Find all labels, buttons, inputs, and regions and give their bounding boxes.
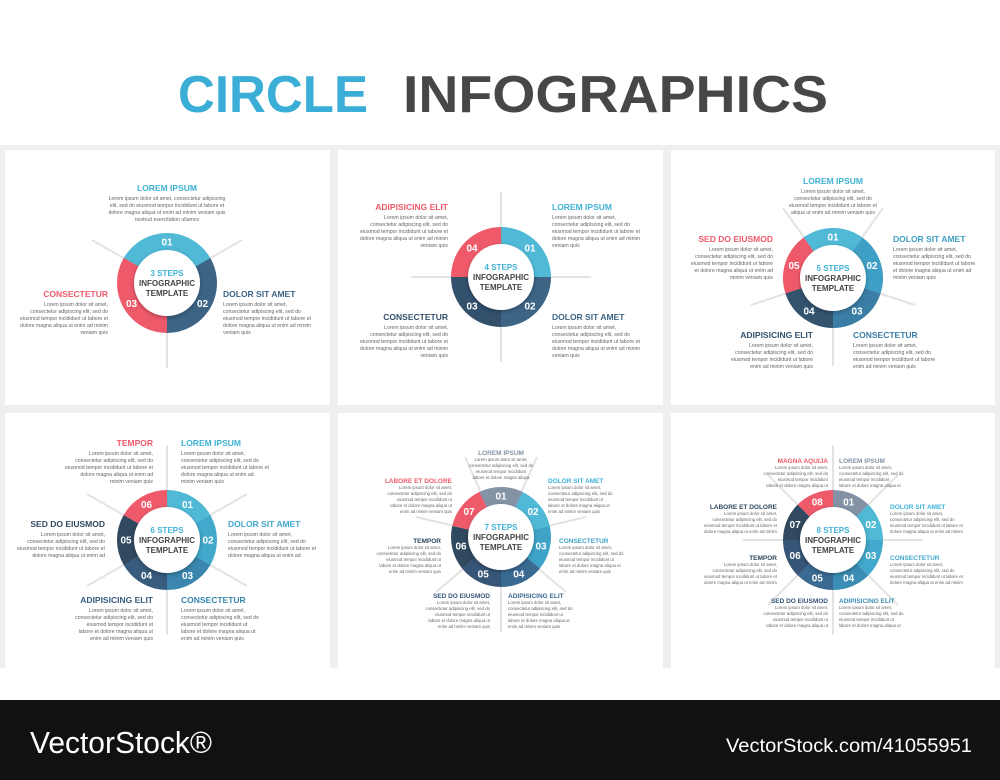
text: sed do eiusmod: minim veniam quis	[730, 275, 773, 281]
panel: 5 steps: INFOGRAPHIC	[805, 274, 861, 283]
text: magna aquija: consectetur adipiscing elit, sed do	[764, 471, 829, 476]
text: adipisicing elit: ADIPISICING ELIT	[839, 598, 895, 605]
panel: 7 steps: 06	[455, 542, 467, 553]
panel: 6 steps: 04	[141, 571, 152, 582]
text: labore et dolore	[385, 478, 453, 514]
text: adipisicing elit: labore et dolore magna aliqua ut	[839, 623, 901, 628]
footer bar: VectorStock®	[30, 725, 212, 760]
text: adipisicing elit: labore et dolore magna aliqua ut	[79, 629, 154, 635]
text: consectetur: enim ad minim veniam quis	[559, 569, 611, 574]
text: labore et dolore: eiusmod tempor incididunt ut labore et	[704, 523, 778, 528]
text: magna aquija: Lorem ipsum dolor sit amet,	[775, 465, 828, 470]
panel: 6 steps: 03	[182, 571, 193, 582]
text: consectetur: consectetur adipiscing elit, sed do	[370, 332, 448, 338]
panel: 6 steps: 06	[141, 500, 152, 511]
text: lorem ipsum: dolore magna aliqua ut enim ad minim veniam quis	[108, 210, 226, 216]
panel: 4 steps: 03	[466, 302, 478, 312]
panel: 8 steps: INFOGRAPHIC	[805, 536, 861, 545]
panel: 3 steps: 01	[161, 238, 173, 248]
text: tempor: consectetur adipiscing elit, sed do	[376, 551, 442, 556]
text: sed do eiusmod: consectetur adipiscing elit, sed do	[426, 606, 491, 611]
text: labore et dolore: Lorem ipsum dolor sit amet,	[724, 511, 777, 516]
text: dolor sit amet: enim ad minim veniam quis	[548, 509, 600, 514]
text: adipisicing elit: enim ad minim veniam quis	[750, 364, 813, 370]
text: magna aquija: MAGNA AQUIJA	[778, 458, 828, 465]
panel: 5 steps: 01	[827, 232, 839, 244]
text: lorem ipsum: LOREM IPSUM	[181, 438, 241, 448]
text: consectetur	[360, 312, 449, 359]
text: sed do eiusmod: SED DO EIUSMOD	[30, 519, 105, 529]
text: consectetur: Lorem ipsum dolor sit amet,	[559, 545, 612, 550]
text: adipisicing elit: consectetur adipiscing elit, sed do	[75, 615, 153, 621]
text: consectetur: Lorem ipsum dolor sit amet,	[44, 302, 108, 308]
text: dolor sit amet: eiusmod tempor incididunt ut labore et	[228, 546, 317, 552]
text: lorem ipsum: Lorem ipsum dolor sit amet,	[181, 451, 245, 457]
title: INFOGRAPHICS	[403, 66, 828, 124]
text: lorem ipsum: Lorem ipsum dolor sit amet,	[839, 465, 892, 470]
text: consectetur: labore et dolore magna aliqua ut	[181, 629, 256, 635]
text: sed do eiusmod	[426, 593, 491, 629]
text: dolor sit amet	[223, 289, 312, 336]
panel: 6 steps: 01	[182, 500, 193, 511]
text: dolor sit amet: DOLOR SIT AMET	[548, 478, 603, 485]
panel: 7 steps: 7 STEPS	[485, 523, 518, 532]
text: sed do eiusmod: eiusmod tempor incididunt ut	[773, 617, 829, 622]
panel: 6 steps: 02	[202, 536, 214, 546]
text: consectetur: CONSECTETUR	[181, 595, 246, 605]
text: lorem ipsum: consectetur adipiscing elit, sed do	[552, 222, 630, 228]
panel: 3 steps: 02	[197, 299, 208, 310]
text: consectetur: CONSECTETUR	[43, 289, 108, 299]
text: sed do eiusmod: consectetur adipiscing elit, sed do	[764, 611, 829, 616]
text: consectetur: eiusmod tempor incididunt ut labore et	[890, 574, 964, 579]
text: sed do eiusmod: consectetur adipiscing elit, sed do	[695, 254, 773, 260]
text: tempor: dolore magna aliqua ut enim ad minim	[704, 580, 777, 585]
text: lorem ipsum	[108, 183, 226, 223]
text: dolor sit amet: consectetur adipiscing elit, sed do	[223, 309, 301, 315]
text: consectetur: consectetur adipiscing elit, sed do	[853, 350, 931, 356]
text: adipisicing elit: Lorem ipsum dolor sit amet,	[839, 605, 892, 610]
text: sed do eiusmod: et dolore magna aliqua ut enim ad	[695, 268, 773, 274]
panel: 3 steps: 03	[126, 299, 137, 310]
text: adipisicing elit	[508, 593, 573, 629]
text: lorem ipsum: labore et dolore magna aliqua ut	[839, 483, 901, 488]
panel: 7 steps: 03	[535, 542, 547, 553]
panel: 7 steps: INFOGRAPHIC	[473, 533, 529, 542]
text: magna aquija: labore et dolore magna aliqua ut	[766, 483, 829, 488]
text: tempor: labore et dolore magna aliqua ut	[379, 563, 442, 568]
text: dolor sit amet: consectetur adipiscing elit, sed do	[548, 491, 613, 496]
text: lorem ipsum: elit, sed do eiusmod tempor incididunt ut labore et	[110, 203, 225, 209]
text: consectetur: veniam quis	[80, 330, 108, 336]
text: labore et dolore: Lorem ipsum dolor sit amet,	[399, 485, 452, 490]
text: adipisicing elit	[839, 598, 904, 628]
text: tempor: Lorem ipsum dolor sit amet,	[724, 562, 777, 567]
text: dolor sit amet: labore et dolore magna aliqua ut	[548, 503, 610, 508]
text: lorem ipsum: labore et dolore magna aliqua	[473, 475, 530, 480]
text: sed do eiusmod: labore et dolore magna aliqua ut	[766, 623, 829, 628]
text: dolor sit amet: et dolore magna aliqua ut enim ad	[893, 268, 972, 274]
text: labore et dolore: dolore magna aliqua ut enim ad minim	[704, 529, 777, 534]
panel: 6 steps: TEMPLATE	[146, 546, 189, 555]
text: sed do eiusmod: eiusmod tempor incididunt ut	[435, 612, 491, 617]
text: tempor: enim ad minim veniam quis	[389, 569, 441, 574]
text: lorem ipsum: eiusmod tempor incididunt	[839, 477, 890, 482]
text: sed do eiusmod: dolore magna aliqua ut enim ad	[32, 553, 105, 559]
text: adipisicing elit: eiusmod tempor incididunt ut	[839, 617, 895, 622]
text: consectetur: dolore magna aliqua ut enim ad minim	[20, 323, 108, 329]
panel: 8 steps: 01	[843, 498, 855, 509]
ring: 8 segments	[775, 482, 891, 598]
text: dolor sit amet: eiusmod tempor incididunt ut	[548, 497, 604, 502]
text: labore et dolore	[704, 504, 778, 534]
text: sed do eiusmod: Lorem ipsum dolor sit amet,	[709, 247, 773, 253]
panel: 8 steps	[671, 413, 995, 668]
text: lorem ipsum	[789, 176, 878, 216]
text: tempor: dolore magna aliqua ut enim ad	[80, 472, 153, 478]
ring: 5 segments	[776, 221, 890, 335]
text: labore et dolore: LABORE ET DOLORE	[385, 478, 453, 485]
panel: 3 steps: 3 STEPS	[151, 269, 184, 278]
text: sed do eiusmod: Lorem ipsum dolor sit amet,	[775, 605, 828, 610]
text: consectetur: enim ad minim veniam quis	[181, 636, 244, 642]
text: lorem ipsum: LOREM IPSUM	[839, 458, 885, 465]
text: lorem ipsum	[181, 438, 270, 485]
text: adipisicing elit: veniam quis	[420, 243, 448, 249]
panel: 7 steps: 04	[513, 569, 525, 580]
text: lorem ipsum: aliqua ut enim ad minim veniam quis	[791, 210, 875, 216]
text: adipisicing elit: enim ad minim veniam quis	[508, 624, 560, 629]
text: tempor: consectetur adipiscing elit, sed do	[75, 458, 153, 464]
text: consectetur: Lorem ipsum dolor sit amet,	[853, 343, 917, 349]
ring: 7 segments	[443, 479, 559, 595]
text: dolor sit amet: consectetur adipiscing elit, sed do	[890, 517, 955, 522]
text: lorem ipsum: nostrud exercitation ullamco	[135, 217, 199, 223]
text: consectetur: dolore magna aliqua ut enim ad minim	[360, 346, 448, 352]
text: dolor sit amet	[893, 234, 975, 281]
text: sed do eiusmod: labore et dolore magna aliqua ut	[428, 618, 491, 623]
text: sed do eiusmod: SED DO EIUSMOD	[771, 598, 828, 605]
footer bar: VectorStock.com/41055951	[726, 736, 972, 757]
text: lorem ipsum: Lorem ipsum dolor sit amet,	[474, 457, 528, 462]
text: dolor sit amet: DOLOR SIT AMET	[890, 504, 945, 511]
text: adipisicing elit: ADIPISICING ELIT	[740, 330, 814, 340]
ring: 4 segments	[460, 236, 542, 318]
panel: 7 steps	[338, 413, 663, 668]
text: lorem ipsum: LOREM IPSUM	[803, 176, 863, 186]
text: lorem ipsum: consectetur adipiscing elit, sed do	[794, 196, 872, 202]
text: adipisicing elit	[360, 202, 449, 249]
text: tempor: minim veniam quis	[110, 479, 153, 485]
panel: 3 steps: INFOGRAPHIC	[139, 279, 195, 288]
text: consectetur: Lorem ipsum dolor sit amet,	[181, 608, 245, 614]
text: adipisicing elit: consectetur adipiscing elit, sed do	[508, 606, 573, 611]
text: tempor: eiusmod tempor incididunt ut labore et	[65, 465, 154, 471]
text: lorem ipsum	[839, 458, 904, 488]
panel: 6 steps	[5, 413, 330, 668]
panel: 8 steps: 03	[865, 551, 877, 562]
text: lorem ipsum: consectetur adipiscing elit, sed do	[181, 458, 259, 464]
text: adipisicing elit	[731, 330, 814, 370]
text: lorem ipsum: Lorem ipsum dolor sit amet,	[801, 189, 865, 195]
text: dolor sit amet: Lorem ipsum dolor sit amet,	[552, 325, 616, 331]
panel: 4 steps: 4 STEPS	[485, 263, 518, 272]
panel: 7 steps: 02	[527, 507, 539, 518]
panel: 5 steps: 02	[866, 261, 878, 272]
panel: 8 steps: 08	[812, 498, 823, 509]
text: dolor sit amet: Lorem ipsum dolor sit amet,	[890, 511, 943, 516]
text: dolor sit amet: DOLOR SIT AMET	[893, 234, 966, 244]
panel: 4 steps: TEMPLATE	[480, 283, 523, 292]
text: labore et dolore: eiusmod tempor incididunt ut	[397, 497, 453, 502]
text: dolor sit amet	[548, 478, 613, 514]
text: lorem ipsum: eiusmod tempor incididunt ut labore et	[552, 229, 641, 235]
text: tempor: TEMPOR	[413, 538, 441, 545]
text: dolor sit amet: Lorem ipsum dolor sit amet,	[223, 302, 287, 308]
text: dolor sit amet: dolore magna aliqua ut enim ad minim	[223, 323, 311, 329]
text: tempor: Lorem ipsum dolor sit amet,	[388, 545, 441, 550]
text: consectetur: eiusmod tempor incididunt ut labore et	[360, 339, 449, 345]
text: dolor sit amet: dolore magna aliqua ut enim ad minim	[552, 346, 640, 352]
text: tempor: TEMPOR	[117, 438, 153, 448]
panel: 6 steps: INFOGRAPHIC	[139, 536, 195, 545]
text: tempor: consectetur adipiscing elit, sed do	[712, 568, 778, 573]
text: dolor sit amet: veniam quis	[223, 330, 251, 336]
text: consectetur: Lorem ipsum dolor sit amet,	[890, 562, 943, 567]
panel: 8 steps: 05	[812, 573, 823, 584]
text: tempor: TEMPOR	[749, 555, 777, 562]
text: lorem ipsum: eiusmod tempor incididunt ut labore et	[181, 465, 270, 471]
text: adipisicing elit: ADIPISICING ELIT	[80, 595, 154, 605]
text: sed do eiusmod: Lorem ipsum dolor sit amet,	[437, 600, 490, 605]
text: magna aquija	[764, 458, 829, 488]
text: adipisicing elit: ADIPISICING ELIT	[508, 593, 564, 600]
text: tempor: eiusmod tempor incididunt ut labore et	[704, 574, 778, 579]
text: consectetur: Lorem ipsum dolor sit amet,	[384, 325, 448, 331]
text: lorem ipsum: LOREM IPSUM	[478, 450, 524, 457]
ring: 3 segments	[111, 227, 223, 339]
text: sed do eiusmod: eiusmod tempor incididunt ut labore	[691, 261, 773, 267]
text: consectetur: consectetur adipiscing elit, sed do	[890, 568, 955, 573]
text: adipisicing elit: eiusmod tempor incididunt ut	[508, 612, 564, 617]
text: dolor sit amet: eiusmod tempor incididunt ut labore et	[552, 339, 641, 345]
text: consectetur	[853, 330, 935, 370]
panel: 3 steps	[5, 150, 330, 405]
panel: 8 steps: 06	[790, 551, 801, 562]
text: labore et dolore: consectetur adipiscing elit, sed do	[388, 491, 453, 496]
text: adipisicing elit: Lorem ipsum dolor sit amet,	[89, 608, 153, 614]
text: dolor sit amet: minim veniam quis	[893, 275, 936, 281]
text: adipisicing elit: eiusmod tempor incididunt ut labore	[731, 357, 813, 363]
text: dolor sit amet: eiusmod tempor incididunt ut labore et	[890, 523, 964, 528]
text: labore et dolore: LABORE ET DOLORE	[710, 504, 778, 511]
panel: 4 steps: 02	[524, 302, 536, 312]
text: dolor sit amet	[228, 519, 317, 559]
text: tempor: Lorem ipsum dolor sit amet,	[89, 451, 153, 457]
text: consectetur: eiusmod tempor incididunt ut labore et	[20, 316, 109, 322]
panel: 4 steps: 01	[524, 244, 536, 254]
text: consectetur: dolore magna aliqua ut enim ad minim	[890, 580, 963, 585]
text: consectetur	[890, 555, 964, 585]
panel: 5 steps: 03	[851, 307, 863, 318]
text: labore et dolore: enim ad minim veniam quis	[400, 509, 452, 514]
panel: 3 steps: TEMPLATE	[146, 289, 189, 298]
text: sed do eiusmod	[764, 598, 829, 628]
text: lorem ipsum: minim veniam quis	[181, 479, 224, 485]
text: consectetur: enim ad minim veniam quis	[853, 364, 916, 370]
panel: 4 steps	[338, 150, 663, 405]
text: adipisicing elit: eiusmod tempor incididunt ut labore et	[360, 229, 449, 235]
text: adipisicing elit: consectetur adipiscing elit, sed do	[735, 350, 813, 356]
text: sed do eiusmod: enim ad minim veniam quis	[438, 624, 490, 629]
text: lorem ipsum: LOREM IPSUM	[137, 183, 197, 193]
text: lorem ipsum: dolore magna aliqua ut enim ad	[181, 472, 254, 478]
text: sed do eiusmod	[17, 519, 106, 559]
text: adipisicing elit: consectetur adipiscing elit, sed do	[839, 611, 904, 616]
text: adipisicing elit: dolore magna aliqua ut enim ad minim	[360, 236, 448, 242]
text: lorem ipsum: dolore magna aliqua ut enim ad minim	[552, 236, 640, 242]
text: magna aquija: eiusmod tempor incididunt	[778, 477, 829, 482]
text: sed do eiusmod	[691, 234, 773, 281]
text: consectetur: veniam quis	[420, 353, 448, 359]
panel: 8 steps: 8 STEPS	[817, 526, 850, 535]
text: dolor sit amet: consectetur adipiscing elit, sed do	[228, 539, 306, 545]
text: dolor sit amet: eiusmod tempor incididunt ut labore	[893, 261, 975, 267]
panel: 5 steps: 04	[803, 307, 815, 318]
text: lorem ipsum: consectetur adipiscing elit, sed do	[469, 463, 534, 468]
ring: 6 segments	[111, 484, 223, 596]
text: tempor	[376, 538, 442, 574]
text: dolor sit amet: consectetur adipiscing elit, sed do	[552, 332, 630, 338]
panel: 5 steps: 05	[788, 261, 800, 272]
text: dolor sit amet: Lorem ipsum dolor sit amet,	[548, 485, 601, 490]
text: adipisicing elit: labore et dolore magna aliqua ut	[508, 618, 570, 623]
text: consectetur: labore et dolore magna aliqua ut	[559, 563, 621, 568]
text: lorem ipsum: Lorem ipsum dolor sit amet,	[552, 215, 616, 221]
text: adipisicing elit: Lorem ipsum dolor sit amet,	[508, 600, 561, 605]
text: dolor sit amet: DOLOR SIT AMET	[552, 312, 625, 322]
panel: 4 steps: 04	[466, 244, 478, 254]
text: adipisicing elit	[75, 595, 154, 642]
panel: 7 steps: TEMPLATE	[480, 543, 523, 552]
text: dolor sit amet: dolore magna aliqua ut enim ad minim	[890, 529, 963, 534]
panel: 8 steps: 02	[865, 520, 877, 531]
text: dolor sit amet: DOLOR SIT AMET	[223, 289, 296, 299]
title: CIRCLE	[178, 66, 368, 124]
text: lorem ipsum	[552, 202, 641, 249]
text: dolor sit amet: veniam quis	[552, 353, 580, 359]
text: adipisicing elit: eiusmod tempor incididunt ut	[87, 622, 154, 628]
text: consectetur: CONSECTETUR	[853, 330, 918, 340]
text: tempor: eiusmod tempor incididunt ut	[386, 557, 442, 562]
text: lorem ipsum: LOREM IPSUM	[552, 202, 612, 212]
text: adipisicing elit: Lorem ipsum dolor sit amet,	[749, 343, 813, 349]
text: labore et dolore: consectetur adipiscing elit, sed do	[712, 517, 778, 522]
text: consectetur: eiusmod tempor incididunt ut labore	[853, 357, 935, 363]
text: sed do eiusmod: SED DO EIUSMOD	[698, 234, 773, 244]
text: sed do eiusmod: SED DO EIUSMOD	[433, 593, 490, 600]
panel: 7 steps: 05	[478, 569, 489, 580]
text: lorem ipsum: eiusmod tempor incididunt ut labore et	[789, 203, 878, 209]
text: sed do eiusmod: consectetur adipiscing elit, sed do	[27, 539, 105, 545]
footer bar	[0, 700, 1000, 780]
text: tempor	[704, 555, 778, 585]
panel: 8 steps: 07	[790, 520, 801, 531]
panel: 6 steps: 05	[120, 536, 132, 546]
text: consectetur: consectetur adipiscing elit, sed do	[30, 309, 108, 315]
text: labore et dolore: labore et dolore magna aliqua ut	[390, 503, 453, 508]
text: consectetur: CONSECTETUR	[559, 538, 609, 545]
text: sed do eiusmod: eiusmod tempor incididunt ut labore et	[17, 546, 106, 552]
text: dolor sit amet	[552, 312, 641, 359]
text: dolor sit amet: dolore magna aliqua ut enim ad	[228, 553, 301, 559]
text: adipisicing elit: ADIPISICING ELIT	[375, 202, 449, 212]
panel: 8 steps: 04	[843, 573, 855, 584]
text: adipisicing elit: consectetur adipiscing elit, sed do	[370, 222, 448, 228]
text: sed do eiusmod: Lorem ipsum dolor sit amet,	[41, 532, 105, 538]
text: dolor sit amet: eiusmod tempor incididunt ut labore et	[223, 316, 312, 322]
text: lorem ipsum: veniam quis	[552, 243, 580, 249]
text: dolor sit amet: consectetur adipiscing elit, sed do	[893, 254, 971, 260]
text: dolor sit amet	[890, 504, 964, 534]
text: lorem ipsum: Lorem ipsum dolor sit amet, consectetur adipiscing	[109, 196, 225, 202]
text: dolor sit amet: Lorem ipsum dolor sit amet,	[228, 532, 292, 538]
text: consectetur: CONSECTETUR	[383, 312, 448, 322]
text: consectetur: eiusmod tempor incididunt ut	[181, 622, 248, 628]
text: consectetur: eiusmod tempor incididunt ut	[559, 557, 615, 562]
text: lorem ipsum: consectetur adipiscing elit, sed do	[839, 471, 904, 476]
text: lorem ipsum: eiusmod tempor incididunt	[476, 469, 527, 474]
text: adipisicing elit: Lorem ipsum dolor sit amet,	[384, 215, 448, 221]
text: consectetur: consectetur adipiscing elit, sed do	[559, 551, 624, 556]
panel: 6 steps: 6 STEPS	[151, 526, 184, 535]
panel: 5 steps: 5 STEPS	[817, 264, 850, 273]
panel: 4 steps: INFOGRAPHIC	[473, 273, 529, 282]
text: adipisicing elit: enim ad minim veniam quis	[90, 636, 153, 642]
text: tempor	[65, 438, 154, 485]
panel: 7 steps: 01	[495, 492, 507, 502]
text: lorem ipsum	[469, 450, 534, 480]
panel: 7 steps: 07	[463, 507, 475, 518]
text: dolor sit amet: DOLOR SIT AMET	[228, 519, 301, 529]
text: consectetur: CONSECTETUR	[890, 555, 940, 562]
text: consectetur: consectetur adipiscing elit, sed do	[181, 615, 259, 621]
text: consectetur	[559, 538, 624, 574]
text: consectetur	[20, 289, 109, 336]
text: consectetur	[181, 595, 259, 642]
panel: 5 steps: TEMPLATE	[812, 284, 855, 293]
panel: 8 steps: TEMPLATE	[812, 546, 855, 555]
panel: 5 steps	[671, 150, 995, 405]
text: dolor sit amet: Lorem ipsum dolor sit amet,	[893, 247, 957, 253]
title	[178, 66, 828, 124]
